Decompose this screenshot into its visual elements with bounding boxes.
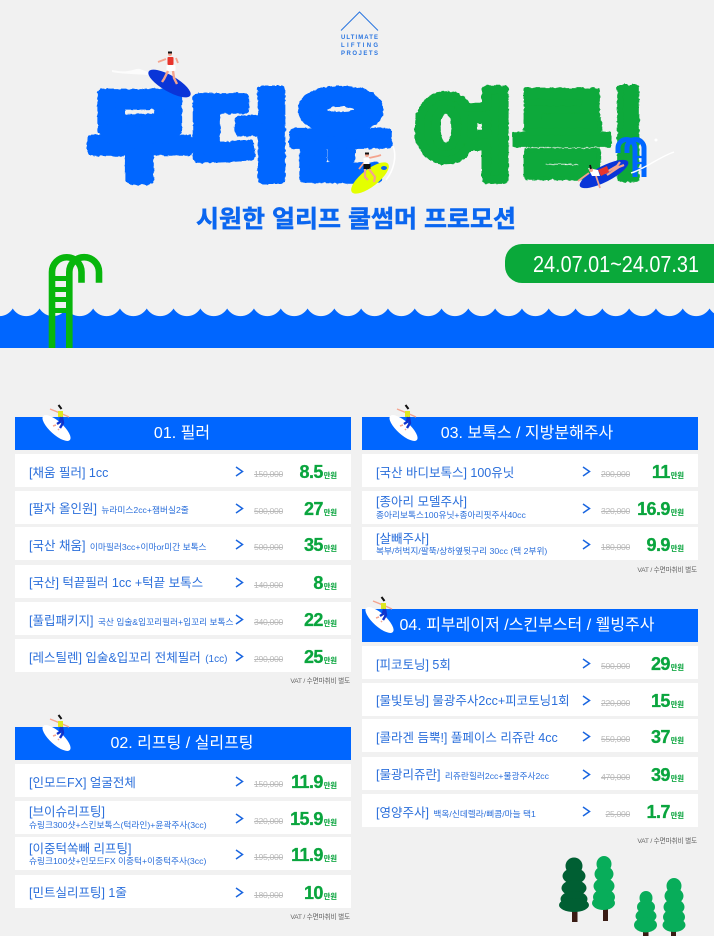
row: 물빛토닝: [물빛토닝] 물광주사2cc+피코토닝1회 [376,694,570,708]
row: 레스틸렌 [15,639,351,672]
row: 팔자 올인원: [팔자 올인원] 뉴라미스2cc+잼버실2줄 [29,502,189,516]
heading: 04: 04. 피부레이저 /스킨부스터 / 웰빙주사 [400,617,654,634]
panel: 04 skin [362,609,698,845]
row: 영양주사: 25,000 [606,809,630,819]
row: 브이슈리프팅: 320,000 [254,816,283,826]
heading: 01: 01. 필러 [154,425,210,442]
title: green word: 름 [510,83,613,191]
row: 살빼주사: [살빼주사] [376,532,429,546]
row: 영양주사: 1.7만원 [647,802,684,822]
row: 종아리 모델주사: [종아리 모델주사] [376,495,467,509]
row: 이중턱쏙빼 리프팅: [이중턱쏙빼 리프팅] [29,842,131,856]
row: 이중턱쏙빼 리프팅 [15,837,351,870]
heading: 02 [15,727,351,760]
icon: surfer section 03 [386,405,421,445]
icon: middle surfer [347,146,395,199]
icon: top surfer [112,52,194,102]
row: 채움 필러 [15,454,351,487]
row: 브이슈리프팅: 15.9만원 [290,809,337,829]
logo: PROJETS [341,51,378,57]
row: 이중턱쏙빼 리프팅: 195,000 [254,852,283,862]
row: 물빛토닝: 15만원 [651,691,684,711]
heading: 03: 03. 보톡스 / 지방분해주사 [441,425,613,442]
row: 살빼주사: 9.9만원 [647,535,684,555]
row: 물광리쥬란: 470,000 [601,772,630,782]
row: 물광리쥬란: 39만원 [651,765,684,785]
icon: surfer section 02 [39,715,74,755]
row: 살빼주사 [362,527,698,560]
heading: 01 [15,417,351,450]
row: 콜라겐 듬뿍: [콜라겐 듬뿍!] 풀페이스 리쥬란 4cc [376,731,558,745]
row: 영양주사: [영양주사] 백옥/신데렐라/삐콤/마늘 택1 [376,806,536,820]
heading: 03 [362,417,698,450]
row: 인모드FX: [인모드FX] 얼굴전체 [29,776,136,790]
title: green word [414,81,674,191]
row: 인모드FX: 150,000 [254,779,283,789]
row: 콜라겐 듬뿍: 550,000 [601,734,630,744]
row: 영양주사 [362,794,698,827]
row: 종아리 모델주사: 320,000 [601,506,630,516]
logo: ULTIMATE [341,35,378,41]
row: 이중턱쏙빼 리프팅: 슈링크100샷+인모드FX 이중턱+이중턱주사(3cc) [29,856,206,866]
row: 피코토닝 [362,646,698,679]
title: blue words: 무 [88,84,192,192]
row: 국산 채움: [국산 채움] 이마필러3cc+이마or미간 보톡스 [29,539,207,553]
icon: tree green 2 [634,891,657,936]
row: 민트실리프팅: 10만원 [304,883,337,903]
row: 국산 바디보톡스: [국산 바디보톡스] 100유닛 [376,466,514,480]
row: 인모드FX: 11.9만원 [291,772,337,792]
icon: tree green 3 [662,878,686,936]
row: 이중턱쏙빼 리프팅: 11.9만원 [291,845,337,865]
icon: surfer lying on board [576,138,674,193]
subtitle: 시원한 얼리프 쿨썸머 프로모션 [196,206,516,233]
row: 팔자 올인원: 500,000 [254,506,283,516]
note: VAT: VAT / 수면마취비 별도 [637,838,697,845]
heading: 04 [362,609,698,642]
panel: 02 lifting [15,727,351,921]
title: blue words: 더 [189,84,290,190]
waves [0,308,714,348]
row: 종아리 모델주사 [362,491,698,524]
row: 풀립패키지: [풀립패키지] 국산 입술&입꼬리필러+입꼬리 보톡스 [29,614,234,628]
icon: green pool ladder [52,257,99,348]
icon: tree green 1 [592,856,615,921]
note: VAT: VAT / 수면마취비 별도 [290,914,350,921]
icon: blue pool ladder in title [618,140,644,177]
heading: 02: 02. 리프팅 / 실리프팅 [110,735,254,752]
date pill [505,244,714,283]
panel: 01 filler [15,417,351,685]
row: 레스틸렌: [레스틸렌] 입술&입꼬리 전체필러 (1cc) [29,650,227,664]
row: 민트실리프팅: 180,000 [254,890,283,900]
row: 국산 바디보톡스 [362,454,698,487]
row: 피코토닝: 500,000 [601,661,630,671]
icon: tree dark [559,858,589,922]
row: 채움 필러: 8.5만원 [300,462,337,482]
row: 피코토닝: [피코토닝] 5회 [376,658,451,672]
row: 턱끝필러: 8만원 [313,573,337,593]
title: green word: ㅣ [582,81,674,191]
row: 채움 필러: [채움 필러] 1cc [29,466,108,480]
row: 채움 필러: 150,000 [254,469,283,479]
row: 풀립패키지: 22만원 [304,610,337,630]
row: 턱끝필러 [15,565,351,598]
row: 종아리 모델주사: 16.9만원 [637,499,684,519]
row: 브이슈리프팅 [15,801,351,834]
row: 국산 채움: 500,000 [254,542,283,552]
row: 민트실리프팅: [민트실리프팅] 1줄 [29,886,127,900]
panel: 03 botox [362,417,698,574]
row: 물광리쥬란: [물광리쥬란] 리쥬란힐러2cc+물광주사2cc [376,768,549,782]
row: 국산 바디보톡스: 200,000 [601,469,630,479]
row: 물빛토닝: 220,000 [601,698,630,708]
row: 국산 바디보톡스: 11만원 [652,462,684,482]
row: 레스틸렌: 290,000 [254,654,283,664]
row: 콜라겐 듬뿍: 37만원 [651,727,684,747]
title: blue words [88,83,391,192]
icon: surfer section 04 [362,597,397,637]
row: 물빛토닝 [362,683,698,716]
row: 살빼주사: 복부/허벅지/팔뚝/상하옆뒷구리 30cc (택 2부위) [376,546,547,556]
note: VAT: VAT / 수면마취비 별도 [290,678,350,685]
row: 팔자 올인원: 27만원 [304,499,337,519]
row: 팔자 올인원 [15,491,351,524]
row: 물광리쥬란 [362,757,698,790]
row: 피코토닝: 29만원 [651,654,684,674]
row: 레스틸렌: 25만원 [304,647,337,667]
icon: surfer section 01 [39,405,74,445]
row: 살빼주사: 180,000 [601,542,630,552]
row: 국산 채움: 35만원 [304,535,337,555]
title: green word: 여 [414,84,513,191]
row: 민트실리프팅 [15,875,351,908]
hero artwork [0,11,714,348]
note: VAT: VAT / 수면마취비 별도 [637,567,697,574]
row: 국산 채움 [15,527,351,560]
row: 브이슈리프팅: 슈링크300샷+스킨보톡스(턱라인)+윤곽주사(3cc) [29,820,207,830]
row: 인모드FX [15,764,351,797]
row: 턱끝필러: [국산] 턱끝필러 1cc +턱끝 보톡스 [29,576,203,590]
row: 브이슈리프팅: [브이슈리프팅] [29,805,105,819]
logo [341,12,378,57]
row: 풀립패키지 [15,602,351,635]
row: 종아리 모델주사: 종아리보톡스100유닛+종아리핏주사40cc [376,510,526,520]
row: 풀립패키지: 340,000 [254,617,283,627]
title: blue words: 운 [290,83,391,192]
logo: LIFTING [341,43,378,49]
row: 턱끝필러: 140,000 [254,580,283,590]
row: 콜라겐 듬뿍 [362,719,698,752]
